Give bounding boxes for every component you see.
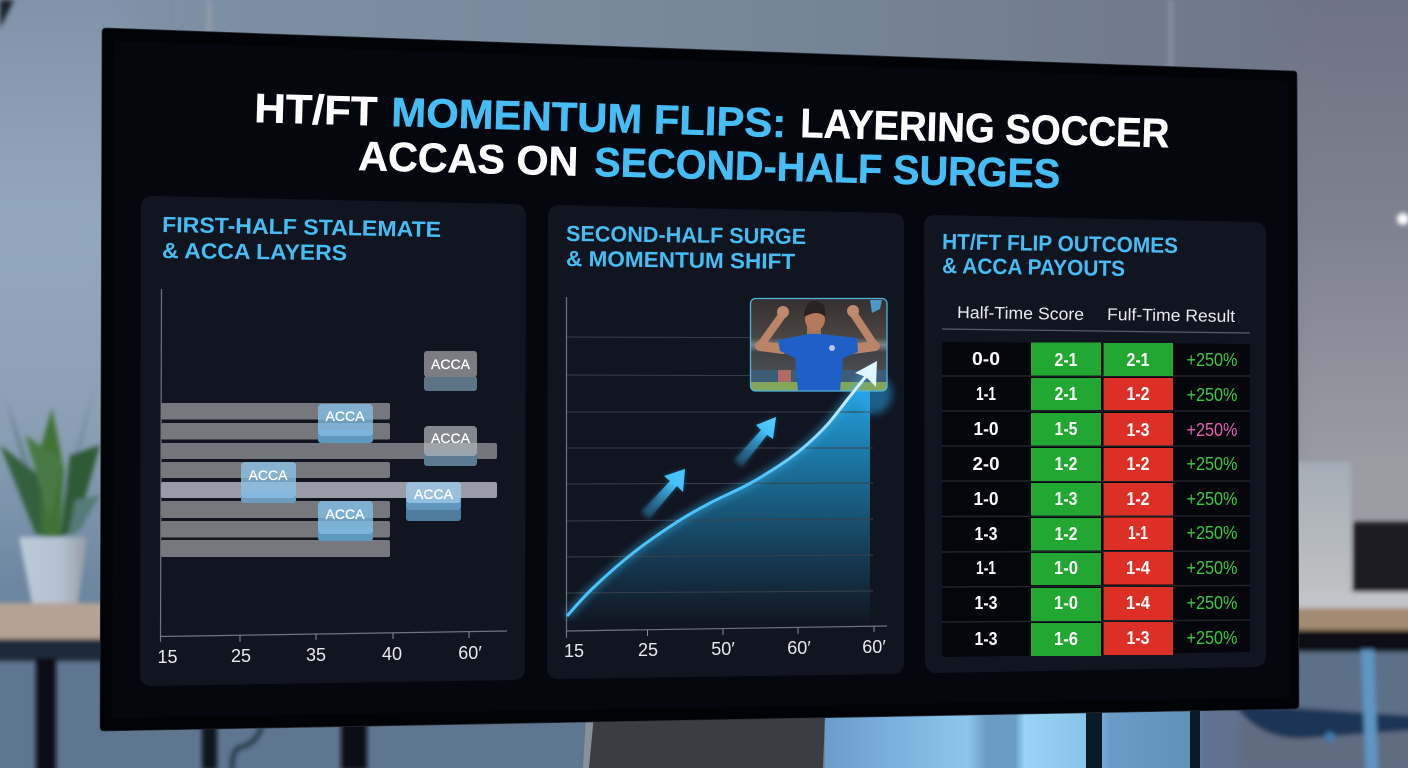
x axis labels: 60′ <box>862 637 886 657</box>
x axis labels: 40 <box>382 644 402 664</box>
row: +250% <box>1186 558 1238 578</box>
row: 1-0 <box>1054 558 1078 578</box>
row: 0-0 <box>972 349 1000 369</box>
ACCA chip top right <box>424 351 477 391</box>
row: 1-1 <box>976 384 996 404</box>
table header: Fulf-Time Result <box>1107 305 1235 326</box>
table header <box>942 303 1250 333</box>
row: +250% <box>1186 420 1238 440</box>
row: 2-1 <box>1054 350 1078 370</box>
bezel <box>100 28 1299 731</box>
x axis labels: 15 <box>157 647 178 667</box>
title: MOMENTUM FLIPS: <box>391 89 787 146</box>
title: HT/FT <box>254 85 378 134</box>
x axis labels: 60′ <box>787 638 811 658</box>
row <box>974 483 1238 516</box>
monitor stand <box>583 715 825 768</box>
area under curve <box>567 371 870 631</box>
row: 1-2 <box>1126 489 1150 509</box>
ACCA chip <box>424 426 477 466</box>
right desk and box <box>1238 462 1408 768</box>
title: SECOND-HALF SURGES <box>594 139 1061 197</box>
row: 1-2 <box>1054 454 1078 474</box>
row <box>974 587 1238 621</box>
left desk and plant <box>0 385 105 768</box>
title: LAYERING SOCCER <box>800 100 1170 156</box>
curve glow <box>567 375 867 616</box>
row: +250% <box>1186 489 1238 509</box>
row: 1-6 <box>1054 629 1078 649</box>
momentum curve <box>567 375 867 616</box>
bars <box>161 403 497 557</box>
photo: celebrating player <box>750 298 887 391</box>
x axis labels: 25 <box>638 640 658 660</box>
ACCA chip: ACCA <box>249 467 288 483</box>
x axis labels <box>564 637 886 661</box>
screen <box>112 41 1290 718</box>
floor area under monitor <box>0 655 1315 768</box>
line chart <box>564 297 892 661</box>
row: 1-3 <box>1054 489 1078 509</box>
heading <box>162 212 441 265</box>
ACCA chip <box>406 482 461 521</box>
row: 1-1 <box>976 558 996 578</box>
arrowhead <box>855 361 877 387</box>
row: +250% <box>1186 385 1238 405</box>
row: 1-2 <box>1054 524 1078 544</box>
title <box>254 85 1170 197</box>
x axis labels <box>157 643 482 667</box>
panel: HT/FT flip outcomes <box>924 215 1266 673</box>
row: 1-0 <box>974 489 998 509</box>
row: +250% <box>1186 350 1238 370</box>
row: 1-3 <box>974 629 998 649</box>
table <box>942 342 1250 657</box>
arrow <box>641 469 685 519</box>
row: 1-4 <box>1126 593 1150 613</box>
ACCA chip: ACCA <box>414 486 454 502</box>
arrow <box>734 417 776 467</box>
monitor <box>100 28 1299 731</box>
heading <box>942 229 1178 281</box>
ACCA chip: ACCA <box>326 408 365 424</box>
x axis labels: 15 <box>564 641 584 661</box>
ACCA chip top right: ACCA <box>431 356 471 372</box>
row: 1-3 <box>1126 420 1150 440</box>
x axis labels: 50′ <box>711 639 735 659</box>
table header: Half-Time Score <box>957 303 1084 324</box>
row <box>974 622 1238 656</box>
x axis labels: 25 <box>231 646 251 666</box>
heading: & ACCA PAYOUTS <box>942 253 1125 281</box>
row: +250% <box>1186 628 1238 648</box>
row: 1-3 <box>974 524 998 544</box>
row: +250% <box>1186 454 1238 474</box>
heading <box>566 221 806 274</box>
row <box>972 448 1238 481</box>
heading: & ACCA LAYERS <box>162 238 347 265</box>
row: 1-2 <box>1126 384 1150 404</box>
row: 1-4 <box>1126 558 1150 578</box>
row: 1-3 <box>1126 628 1150 648</box>
heading: HT/FT FLIP OUTCOMES <box>942 229 1178 258</box>
row: 1-3 <box>974 593 998 613</box>
row <box>976 552 1238 585</box>
row: 1-0 <box>974 419 998 439</box>
ACCA chip <box>318 501 373 541</box>
heading: FIRST-HALF STALEMATE <box>162 212 441 242</box>
row: 1-1 <box>1128 523 1148 543</box>
row <box>972 342 1238 376</box>
x axis labels: 35 <box>306 645 326 665</box>
ACCA chip: ACCA <box>431 430 471 446</box>
row: +250% <box>1186 593 1238 613</box>
heading: SECOND-HALF SURGE <box>566 221 806 249</box>
row: 1-2 <box>1126 454 1150 474</box>
x axis labels: 60′ <box>458 643 482 663</box>
title: ACCAS ON <box>358 133 579 185</box>
panel: first-half stalemate <box>140 196 526 686</box>
row <box>974 413 1238 446</box>
row <box>974 518 1238 550</box>
row: 1-0 <box>1054 593 1078 613</box>
row: 2-1 <box>1054 384 1078 404</box>
row <box>976 378 1238 410</box>
ACCA chip <box>241 462 296 503</box>
panel: second-half surge <box>547 205 904 679</box>
row: 1-5 <box>1054 419 1078 439</box>
photo glow <box>856 374 892 414</box>
bar chart <box>157 289 507 667</box>
row: 2-0 <box>972 454 1000 474</box>
ACCA chip <box>318 404 373 443</box>
row: 2-1 <box>1126 350 1150 370</box>
heading: & MOMENTUM SHIFT <box>566 246 796 274</box>
ACCA chip: ACCA <box>326 506 365 522</box>
row: +250% <box>1186 523 1238 543</box>
